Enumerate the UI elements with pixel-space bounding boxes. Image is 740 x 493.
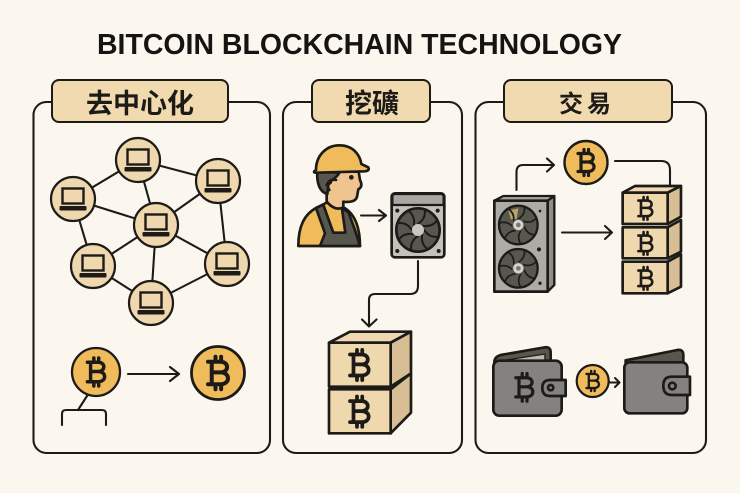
icon: coin in transit (577, 365, 609, 397)
arrow: coin to wallet (610, 378, 620, 387)
heading: transactions: 交易 (559, 90, 615, 118)
panel: mining (283, 80, 462, 453)
icon: miner with hard hat (298, 145, 369, 246)
heading: transactions (504, 80, 672, 122)
title: BITCOIN BLOCKCHAIN TECHNOLOGY (97, 29, 622, 61)
icon: receiving wallet (624, 350, 690, 413)
icon: sending wallet (493, 347, 566, 416)
heading: decentralization: 去中心化 (86, 89, 194, 119)
icon: small bitcoin coin (72, 348, 120, 396)
icon: bracket under coin (62, 396, 106, 425)
node: center computer (134, 203, 178, 247)
icon: dual fan mining rig (494, 196, 554, 292)
arrow: miner to rig (361, 210, 386, 221)
panel: transactions (476, 80, 706, 453)
icon: large bitcoin coin (192, 346, 244, 400)
heading: mining (312, 80, 430, 122)
icon: bitcoin coin (564, 141, 608, 184)
connector: coin to blocks (615, 161, 670, 187)
node: upper right computer (196, 159, 240, 203)
node: bottom computer (129, 281, 173, 325)
node: lower right computer (205, 242, 249, 286)
heading: decentralization (52, 80, 228, 122)
node: top computer (116, 138, 160, 182)
icon: stacked bitcoin blocks (329, 332, 411, 433)
network diagram (51, 138, 249, 325)
icon: mining fan unit (392, 193, 444, 257)
arrow: rig to coin (516, 158, 554, 190)
arrow: rig to blocks (362, 261, 418, 326)
icon: three stacked bitcoin blocks (623, 186, 681, 293)
node: left computer (51, 177, 95, 221)
heading: mining: 挖礦 (345, 88, 399, 119)
arrow: rig to blocks (562, 226, 612, 239)
panel: decentralization (34, 80, 270, 453)
node: lower left computer (71, 244, 115, 288)
arrow: coin to coin (128, 367, 179, 381)
